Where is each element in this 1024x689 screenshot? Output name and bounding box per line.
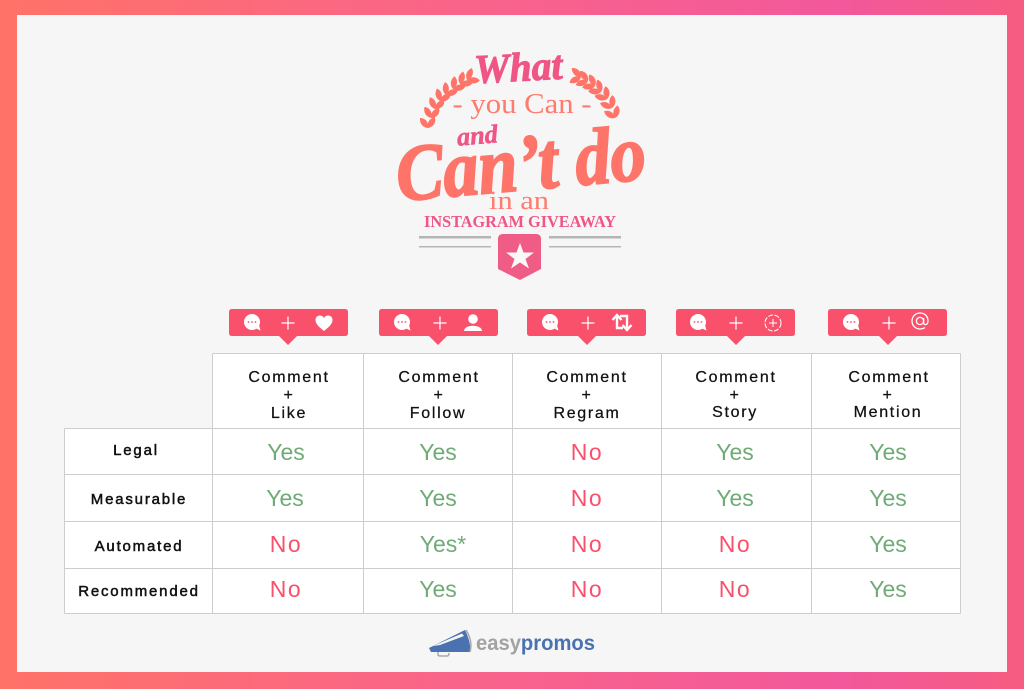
row: measurable: Yes [266, 485, 304, 511]
tag: comment + mention [828, 309, 947, 345]
column header: like: Like [271, 405, 307, 422]
row: recommended [78, 576, 907, 602]
row: automated: Automated [95, 538, 183, 555]
column header: story: Comment [695, 369, 777, 386]
column header: follow: + [433, 387, 445, 404]
column header: mention [848, 369, 930, 421]
row: legal: Yes [716, 439, 754, 465]
icon: right laurel [568, 66, 622, 121]
column header: like [248, 369, 330, 422]
column header: story [695, 369, 777, 421]
row: recommended: Yes [419, 576, 457, 602]
column header: mention: Mention [854, 404, 922, 421]
row: automated: No [719, 531, 751, 557]
icon: story [765, 315, 781, 331]
column header: follow: Comment [398, 369, 480, 386]
column header: regram: Regram [553, 405, 621, 422]
title badge [392, 42, 649, 280]
table [64, 354, 960, 614]
row: recommended: No [719, 576, 751, 602]
row: measurable [91, 485, 907, 511]
row: legal: Yes [419, 439, 457, 465]
heading: Can't do: Can’t do [392, 109, 649, 219]
icon: at sign [912, 313, 928, 329]
text: easypromos: easypromos [476, 632, 595, 655]
row: measurable: Measurable [91, 491, 187, 508]
tag: comment + story [676, 309, 795, 345]
row: legal: Yes [869, 439, 907, 465]
icon: left laurel [419, 67, 480, 130]
column header: like: + [283, 387, 295, 404]
row: automated: No [270, 531, 302, 557]
column header: regram: Comment [546, 369, 628, 386]
row: automated [95, 531, 907, 557]
icon: megaphone [429, 630, 471, 656]
row: measurable: No [571, 485, 603, 511]
text: you can: - you Can - [452, 88, 592, 120]
column header: follow [398, 369, 480, 422]
row: recommended: Yes [869, 576, 907, 602]
logo: easypromos [429, 630, 595, 656]
tag: comment + like [229, 309, 348, 345]
row: automated: Yes [869, 531, 907, 557]
column header: mention: Comment [848, 369, 930, 386]
row: legal [113, 439, 907, 465]
column header: follow: Follow [410, 405, 466, 422]
text: Instagram giveaway: INSTAGRAM GIVEAWAY [424, 212, 616, 231]
text: in an: in an [489, 186, 549, 215]
text: and: and [456, 119, 500, 152]
tag: comment + regram [527, 309, 646, 345]
heading: What: What [473, 42, 565, 92]
row: legal: Yes [267, 439, 305, 465]
icon: person [464, 314, 482, 331]
tag: comment + follow [379, 309, 498, 345]
row: legal: Legal [113, 442, 159, 459]
column header: story: + [729, 387, 741, 404]
column header: story: Story [712, 404, 758, 421]
column header: mention: + [882, 387, 894, 404]
column header: like: Comment [248, 369, 330, 386]
icon: star shield [498, 234, 541, 280]
table grid [64, 354, 960, 614]
row: legal: No [571, 439, 603, 465]
row: automated: No [571, 531, 603, 557]
row: recommended: Recommended [78, 583, 200, 600]
row: measurable: Yes [869, 485, 907, 511]
row: recommended: No [270, 576, 302, 602]
row: automated: Yes* [420, 531, 466, 557]
row: measurable: Yes [716, 485, 754, 511]
row: recommended: No [571, 576, 603, 602]
column header: regram: + [581, 387, 593, 404]
icon: regram arrows [612, 315, 632, 330]
row: measurable: Yes [419, 485, 457, 511]
column header: regram [546, 369, 628, 422]
icon: heart [316, 316, 332, 331]
